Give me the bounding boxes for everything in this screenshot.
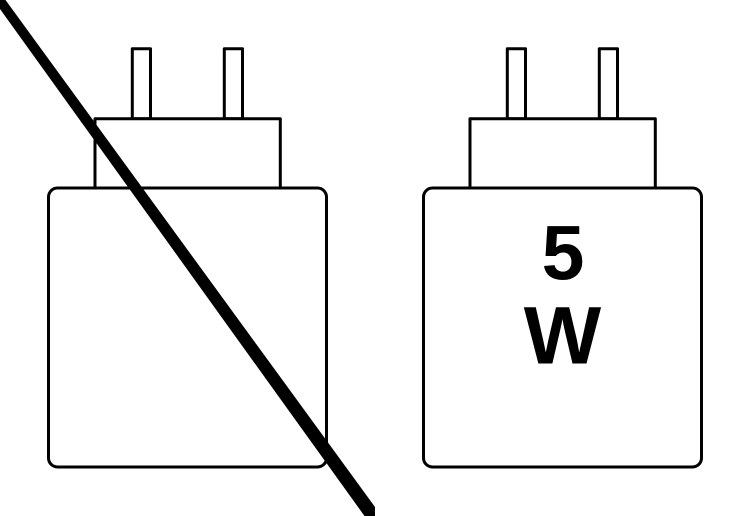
icon: 5 W charger xyxy=(424,49,702,467)
label: W: W xyxy=(524,290,602,382)
label: 5: 5 xyxy=(542,210,584,296)
icon: diagonal strike line xyxy=(0,0,375,516)
icon: crossed-out charger xyxy=(48,49,326,467)
